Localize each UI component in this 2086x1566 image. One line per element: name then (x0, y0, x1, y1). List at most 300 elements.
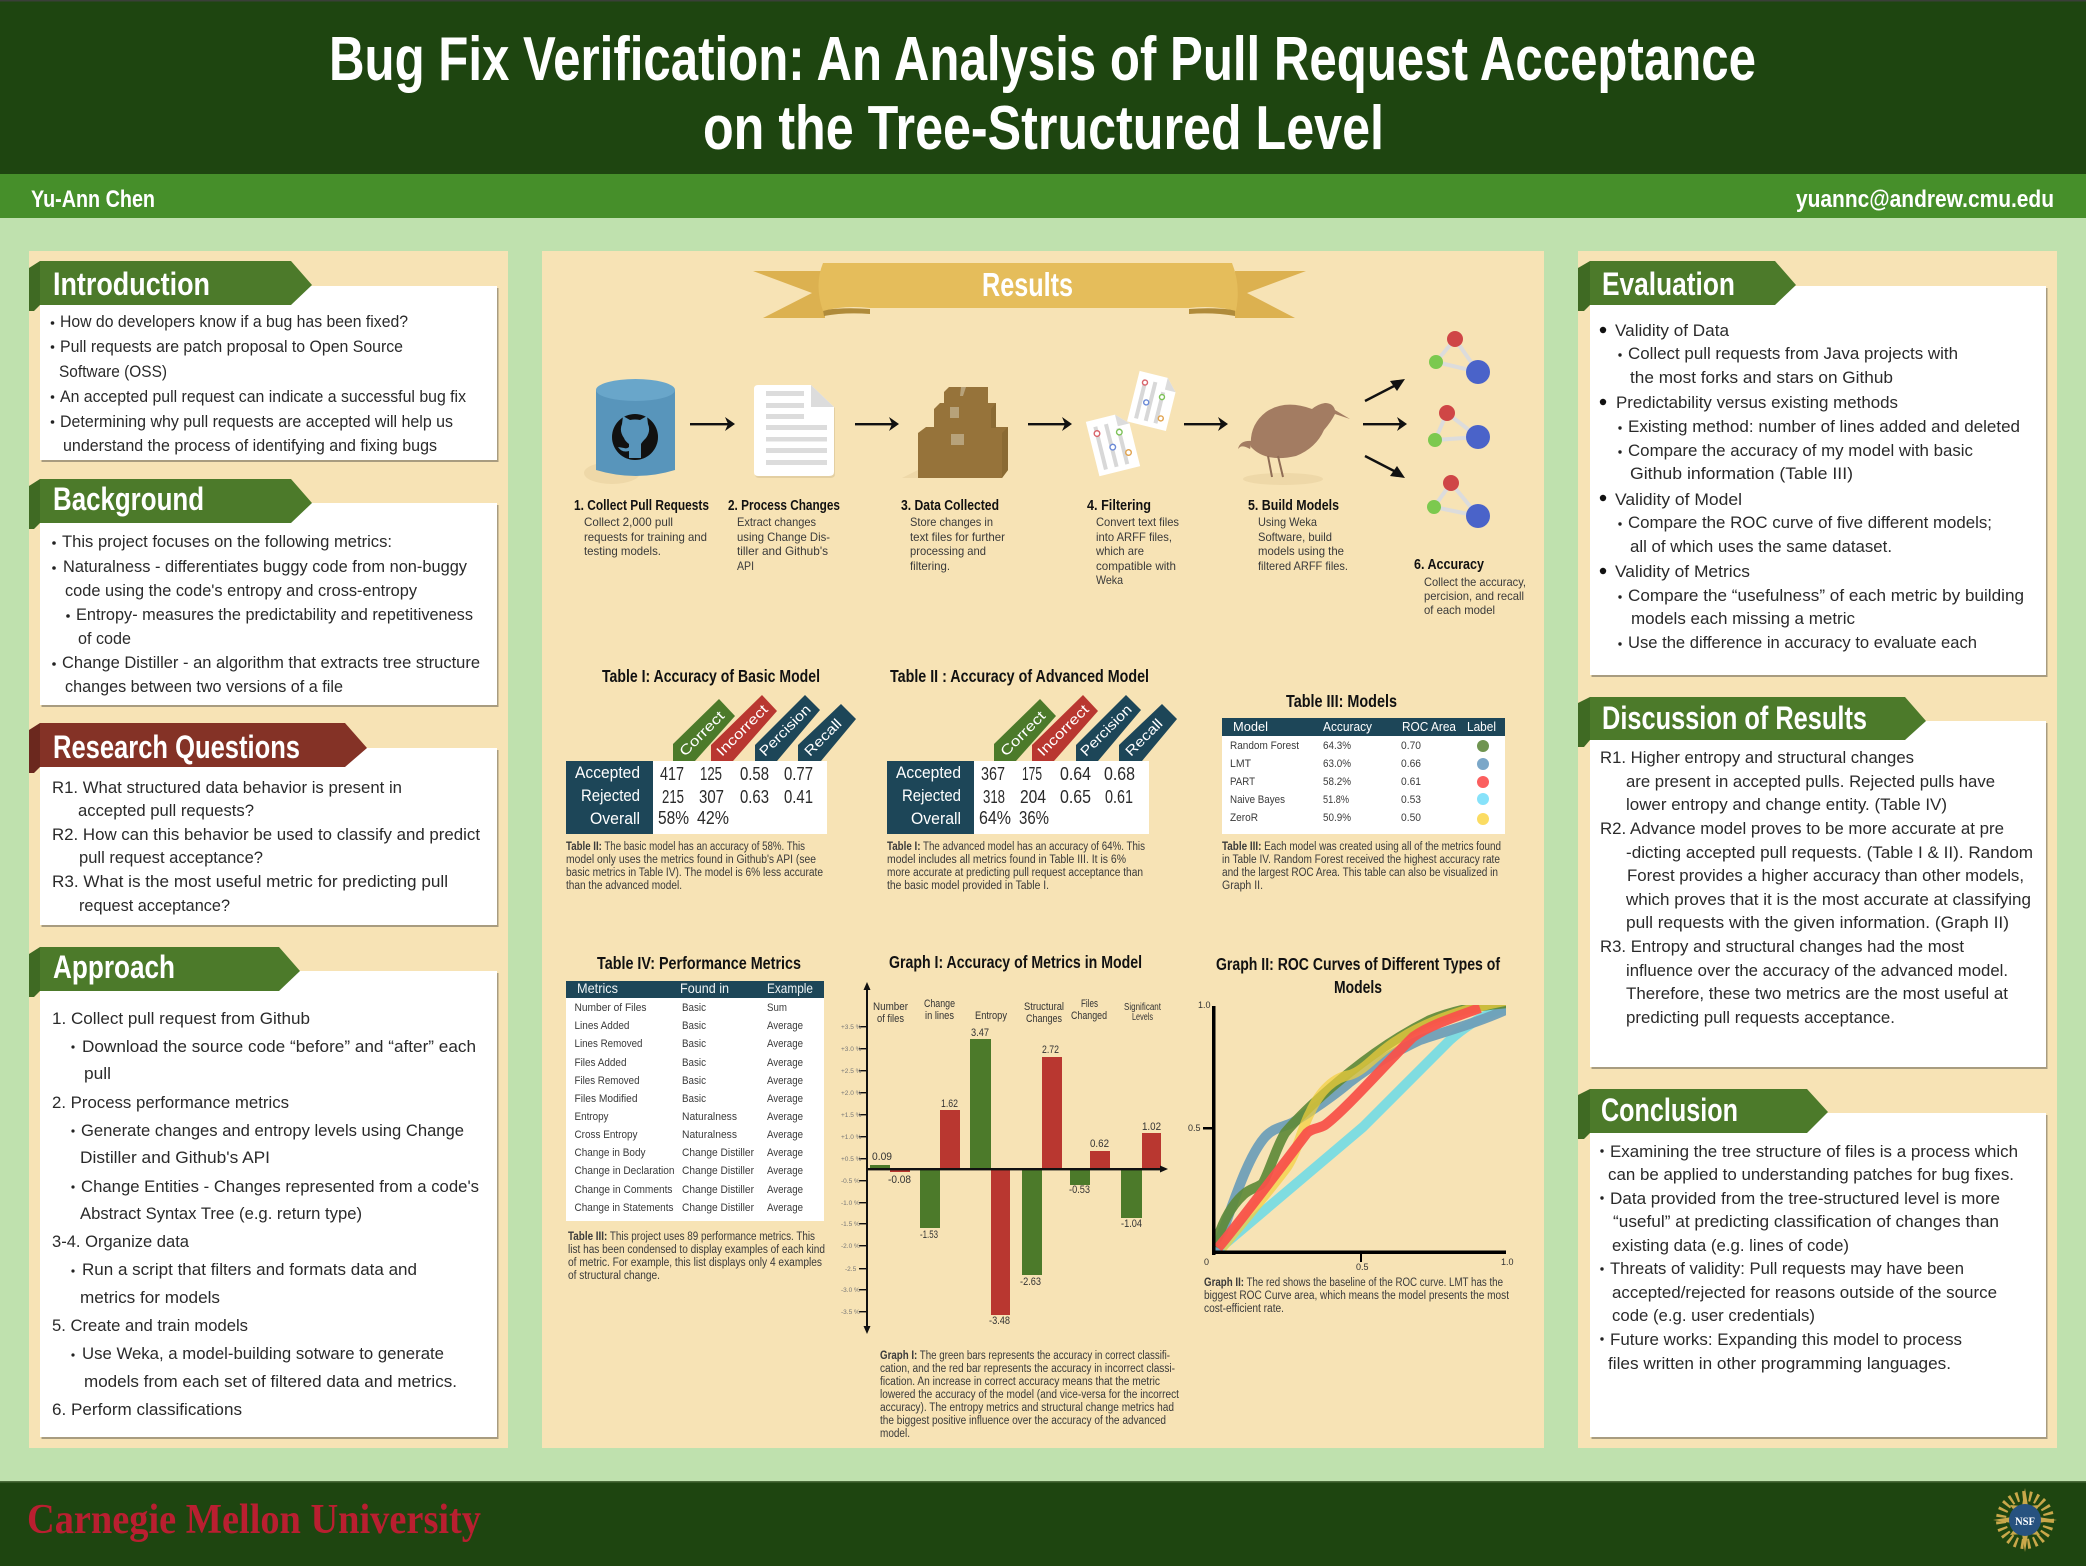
heading: discussion of results: Discussion of Results (1602, 700, 1867, 736)
text: evaluation bullets: Validity of Model (1615, 490, 1742, 509)
heading: results: Results (982, 266, 1073, 303)
text: research questions list: R1. What structured data behavior is present in (52, 778, 402, 797)
table II: accuracy of advanced model: Incorrect (1034, 701, 1092, 759)
heading: background: Background (53, 481, 204, 517)
text: approach steps: Generate changes and entropy levels using Change (81, 1121, 464, 1140)
table I: accuracy of basic model: 215 (662, 787, 684, 807)
arrow: step 2 to 3 (855, 417, 899, 431)
caption: graph I: cation, and the red bar represents the accuracy in incorrect classi- (880, 1363, 1175, 1375)
step 2 text: Extract changes (737, 515, 816, 529)
chart: graph I bar chart: -1.0 % (841, 1200, 860, 1207)
step 4 text: compatible with (1096, 559, 1176, 573)
caption: table IV: of structural change. (568, 1270, 660, 1282)
arrow: step 1 to 2 (690, 417, 735, 431)
chart: graph I bar chart: +2.5 % (841, 1068, 862, 1075)
table IV: performance metrics: Basic (682, 1038, 706, 1050)
table IV: performance metrics: Change in Declaration (574, 1165, 674, 1177)
table IV: performance metrics: Change Distiller (682, 1184, 754, 1196)
caption: table I (566, 841, 823, 892)
text: discussion answers (1600, 748, 2033, 1027)
text: conclusion bullets: code (e.g. user credentials) (1612, 1306, 1815, 1325)
table III: models: 0.70 (1401, 740, 1421, 752)
text: evaluation bullets (1600, 321, 2024, 652)
author name: Yu-Ann Chen (31, 186, 155, 213)
caption: table II: model includes all metrics found in Table III. It is 6% (887, 854, 1126, 866)
text: introduction bullets: Determining why pull requests are accepted will help us (60, 412, 453, 431)
arrow: step 3 to 4 (1028, 417, 1072, 431)
step 2 text: API (737, 559, 754, 573)
table IV: performance metrics: Basic (682, 1002, 706, 1014)
text: discussion answers: which proves that it is the most accurate at classifying (1625, 890, 2031, 909)
caption: graph I: model. (880, 1428, 910, 1440)
table I: accuracy of basic model: 0.77 (784, 764, 813, 784)
chart: graph I bar chart: -1.5 % (841, 1221, 860, 1228)
table IV: performance metrics: Example (767, 980, 813, 996)
heading: evaluation: Evaluation (1602, 266, 1735, 302)
table IV: performance metrics: Change Distiller (682, 1165, 754, 1177)
text: background bullets (52, 532, 480, 696)
table I: accuracy of basic model: 417 (660, 764, 684, 784)
caption: table IV: of metric. For example, this list displays only 4 examples (568, 1257, 822, 1269)
table IV: performance metrics: Number of Files (574, 1002, 647, 1014)
table IV: performance metrics: Average (767, 1184, 803, 1196)
table IV: performance metrics: Metrics (577, 980, 618, 996)
arrow: step 4 to 5 (1184, 417, 1228, 431)
chart: graph I bar chart: Files (1081, 998, 1098, 1010)
table IV: performance metrics: Cross Entropy (574, 1129, 638, 1141)
table I: accuracy of basic model: Rejected (581, 786, 640, 805)
table III: models: LMT (1230, 758, 1251, 770)
text: evaluation bullets: Github information (Table III) (1630, 464, 1853, 483)
text: conclusion bullets: accepted/rejected for reasons outside of the source (1612, 1283, 1997, 1302)
table IV: performance metrics: Found in (680, 980, 729, 996)
step 6 text: 6. Accuracy (1414, 557, 1484, 573)
step 5 text (1248, 498, 1348, 573)
text: conclusion bullets: existing data (e.g. lines of code) (1612, 1236, 1849, 1255)
caption: table I: basic metrics in Table IV). The model is 6% less accurate (566, 867, 823, 879)
chart: graph I bar chart: Significant (1124, 1002, 1161, 1013)
text: approach steps: 2. Process performance metrics (52, 1093, 289, 1112)
text: discussion answers: lower entropy and change entity. (Table IV) (1626, 795, 1947, 814)
icon: document (754, 385, 835, 478)
text: approach steps: Distiller and Github's API (80, 1148, 270, 1167)
text: approach steps: Run a script that filters and formats data and (82, 1260, 417, 1279)
text: approach steps (52, 1009, 479, 1419)
heading: graph II: Graph II: ROC Curves of Different Types of (1216, 954, 1500, 974)
chart: graph I bar chart: -0.53 (1069, 1184, 1090, 1196)
text: evaluation bullets: Compare the “usefulness” of each metric by building (1628, 586, 2024, 605)
chart: graph I bar chart: -1.53 (920, 1229, 938, 1241)
panel: results (542, 251, 1544, 1448)
table IV: performance metrics: Change in Statements (574, 1202, 674, 1214)
table I: accuracy of basic model: 0.41 (784, 787, 813, 807)
chart: graph I bar chart: 0.62 (1090, 1138, 1109, 1150)
text: background bullets: changes between two versions of a file (65, 677, 343, 696)
table IV: performance metrics: Average (767, 1165, 803, 1177)
text: approach steps: Use Weka, a model-building sotware to generate (82, 1344, 444, 1363)
chart: graph I bar chart: Number (873, 1001, 908, 1013)
chart: graph II ROC curves: 0 (1204, 1257, 1209, 1267)
caption: table III: and the largest ROC Area. This table can also be visualized in (1222, 867, 1498, 879)
caption: table I: model only uses the metrics found in Github's API (see (566, 854, 816, 866)
table III: models: 63.0% (1323, 758, 1351, 770)
caption: table II: the basic model provided in Table I. (887, 880, 1049, 892)
chart: graph I bar chart: -2.5 (845, 1266, 857, 1273)
step 3 text: filtering. (910, 559, 950, 573)
table IV: performance metrics: Change Distiller (682, 1147, 754, 1159)
table IV: performance metrics: Basic (682, 1075, 706, 1087)
text: research questions list: R2. How can this behavior be used to classify and predict (52, 825, 480, 844)
step 4 text: Convert text files (1096, 515, 1179, 529)
logo: nsf seal (1993, 1488, 2057, 1552)
caption: table III: in Table IV. Random Forest received the highest accuracy rate (1222, 854, 1500, 866)
text: research questions list: pull request acceptance? (79, 848, 263, 867)
table III: models: ZeroR (1230, 812, 1258, 824)
caption: table III: Graph II. (1222, 880, 1263, 892)
text: approach steps: 5. Create and train models (52, 1316, 248, 1335)
text: research questions list (52, 778, 480, 915)
step 2 text: using Change Dis- (737, 530, 830, 544)
table IV: performance metrics: Sum (767, 1002, 787, 1014)
step 1 text: testing models. (584, 544, 661, 558)
step 5 text: filtered ARFF files. (1258, 559, 1348, 573)
chart: graph I bar chart: +0.5 % (841, 1156, 862, 1163)
chart: graph II ROC curves: 0.5 (1356, 1262, 1369, 1272)
banner: results (753, 263, 1306, 318)
text: evaluation bullets: Use the difference in accuracy to evaluate each (1628, 633, 1977, 652)
table I: accuracy of basic model: 0.58 (740, 764, 769, 784)
text: conclusion bullets: files written in other programming languages. (1608, 1354, 1951, 1373)
chart: graph I bar chart: 1.62 (941, 1098, 958, 1110)
step 1 text: Collect 2,000 pull (584, 515, 673, 529)
table IV: performance metrics: Naturalness (682, 1129, 737, 1141)
table II: accuracy of advanced model: Accepted (896, 763, 961, 782)
table I: accuracy of basic model: 42% (697, 808, 729, 828)
panel: approach (29, 947, 498, 1439)
table IV: performance metrics: Basic (682, 1057, 706, 1069)
step 1 text: 1. Collect Pull Requests (574, 498, 709, 514)
step 4 text: which are (1095, 544, 1144, 558)
title: on the Tree-Structured Level (703, 94, 1384, 163)
caption: graph I: Graph I: The green bars represents the accuracy in correct classifi- (880, 1350, 1170, 1362)
table IV: performance metrics: Basic (682, 1093, 706, 1105)
logo: nsf seal: NSF (2015, 1514, 2035, 1528)
heading: graph II: Models (1334, 977, 1382, 997)
chart: graph I bar chart: -0.5 % (841, 1178, 860, 1185)
table III: models: 0.50 (1401, 812, 1421, 824)
step 2 text: 2. Process Changes (728, 498, 840, 514)
table III: models: 50.9% (1323, 812, 1351, 824)
title: Bug Fix Verification: An Analysis of Pull Request Acceptance (329, 25, 1756, 94)
text: evaluation bullets: Collect pull requests from Java projects with (1628, 344, 1958, 363)
chart: graph II ROC curves: 1.0 (1501, 1257, 1514, 1267)
caption: table IV (568, 1231, 825, 1282)
table IV: performance metrics: Naturalness (682, 1111, 737, 1123)
chart: graph I bar chart: Levels (1132, 1012, 1153, 1023)
table III: models: 0.61 (1401, 776, 1421, 788)
table II: accuracy of advanced model: Correct (997, 707, 1049, 759)
table I: accuracy of basic model: 0.63 (740, 787, 769, 807)
text: approach steps: pull (84, 1064, 111, 1083)
step 3 text: text files for further (910, 530, 1005, 544)
chart: graph I bar chart: 3.47 (971, 1027, 989, 1039)
text: background bullets: Change Distiller - an algorithm that extracts tree structure (62, 653, 480, 672)
caption: table II: Table I: The advanced model has an accuracy of 64%. This (887, 841, 1145, 853)
table II: accuracy of advanced model: 0.64 (1060, 764, 1091, 784)
caption: graph I: the biggest positive influence over the accuracy of the advanced (880, 1415, 1166, 1427)
table IV: performance metrics: Average (767, 1075, 803, 1087)
heading: table II: Table II : Accuracy of Advanced Model (890, 666, 1149, 686)
text: introduction bullets: Software (OSS) (59, 362, 167, 381)
table II: accuracy of advanced model: 175 (1022, 764, 1042, 784)
text: background bullets: of code (78, 629, 131, 648)
table IV: performance metrics: Basic (682, 1020, 706, 1032)
caption: graph II: Graph II: The red shows the baseline of the ROC curve. LMT has the (1204, 1277, 1503, 1289)
table IV: performance metrics: Average (767, 1038, 803, 1050)
table III: models: Random Forest (1230, 740, 1299, 752)
table III: models: 0.53 (1401, 794, 1421, 806)
table II: accuracy of advanced model: 367 (981, 764, 1005, 784)
heading: research questions: Research Questions (53, 729, 300, 765)
panel: discussion of results (1578, 697, 2048, 1069)
heading: approach: Approach (53, 949, 175, 985)
text: background bullets: Entropy- measures the predictability and repetitiveness (76, 605, 473, 624)
text: conclusion bullets (1600, 1142, 2018, 1373)
text: introduction bullets: How do developers know if a bug has been fixed? (60, 312, 408, 331)
text: research questions list: request acceptance? (79, 896, 230, 915)
icon: model network bottom (1427, 475, 1490, 528)
table IV: performance metrics: Average (767, 1202, 803, 1214)
panel: conclusion (1578, 1089, 2048, 1439)
caption: table IV: Table III: This project uses 89 performance metrics. This (568, 1231, 815, 1243)
text: approach steps: Download the source code “before” and “after” each (82, 1037, 476, 1056)
icon: github database cylinder (584, 379, 675, 484)
text: background bullets: Naturalness - differentiates buggy code from non-buggy (63, 557, 467, 576)
caption: graph I: fication. An increase in correct accuracy means that the metric (880, 1376, 1160, 1388)
table III: models: ROC Area (1402, 719, 1457, 734)
chart: graph I bar chart: -2.63 (1020, 1276, 1041, 1288)
table IV: performance metrics: Average (767, 1129, 803, 1141)
table I: accuracy of basic model: Overall (590, 809, 640, 828)
text: discussion answers: predicting pull requests acceptance. (1626, 1008, 1895, 1027)
text: conclusion bullets: Threats of validity: Pull requests may have been (1610, 1259, 1964, 1278)
table IV: performance metrics: Lines Removed (574, 1038, 642, 1050)
text: background bullets: This project focuses on the following metrics: (62, 532, 392, 551)
text: evaluation bullets: Validity of Data (1615, 321, 1730, 340)
arrows: model to accuracy (1363, 379, 1407, 478)
chart: graph I bar chart: 0.09 (872, 1151, 892, 1163)
step 4 text: 4. Filtering (1087, 498, 1151, 514)
table I: accuracy of basic model: 58% (658, 808, 689, 828)
text: approach steps: Abstract Syntax Tree (e.g. return type) (80, 1204, 362, 1223)
step 5 text: Using Weka (1258, 515, 1317, 529)
heading: table III: Table III: Models (1286, 691, 1397, 711)
step 6 text: percision, and recall (1424, 589, 1524, 603)
step 4 text: into ARFF files, (1096, 530, 1172, 544)
panel: introduction (29, 261, 498, 462)
table III: models: Accuracy (1323, 719, 1372, 734)
caption: table III (1222, 841, 1501, 892)
step 5 text: 5. Build Models (1248, 498, 1339, 514)
header band (0, 0, 2086, 174)
table II: accuracy of advanced model: Percision (1077, 701, 1135, 759)
chart: graph I bar chart: in lines (925, 1010, 954, 1022)
table II: accuracy of advanced model: Rejected (902, 786, 961, 805)
table I: accuracy of basic model: Recall (801, 715, 845, 759)
table IV: performance metrics: Average (767, 1020, 803, 1032)
step 4 text (1087, 498, 1179, 587)
chart: graph II ROC curves (1188, 1000, 1514, 1272)
text: discussion answers: Therefore, these two metrics are the most useful at (1626, 984, 2008, 1003)
step 1 text (574, 498, 709, 558)
step 6 text: of each model (1424, 603, 1495, 617)
text: evaluation bullets: Predictability versus existing methods (1616, 393, 1898, 412)
chart: graph I bar chart: -3.0 % (841, 1287, 860, 1294)
table IV: performance metrics: Files Removed (574, 1075, 640, 1087)
chart: graph I bar chart: +1.0 % (841, 1134, 862, 1141)
text: evaluation bullets: models each missing a metric (1631, 609, 1855, 628)
table IV: performance metrics: Average (767, 1093, 803, 1105)
logo: university wordmark: Carnegie Mellon University (27, 1497, 481, 1543)
step 5 text: Software, build (1258, 530, 1332, 544)
text: discussion answers: R3. Entropy and structural changes had the most (1600, 937, 1964, 956)
step 3 text (901, 498, 1005, 573)
table IV: performance metrics: Change in Body (574, 1147, 646, 1159)
text: conclusion bullets: “useful” at predicting classification of changes than (1613, 1212, 1999, 1231)
text: research questions list: accepted pull requests? (78, 801, 254, 820)
caption: table III: Table III: Each model was created using all of the metrics found (1222, 841, 1501, 853)
caption: graph I: lowered the accuracy of the model (and vice-versa for the incorrect (880, 1389, 1180, 1401)
chart: graph I bar chart: Changes (1026, 1013, 1062, 1025)
text: approach steps: 6. Perform classifications (52, 1400, 242, 1419)
text: evaluation bullets: Existing method: number of lines added and deleted (1628, 417, 2020, 436)
icon: model network top (1429, 331, 1490, 384)
step 2 text (728, 498, 840, 573)
table III: models: 0.66 (1401, 758, 1421, 770)
chart: graph I bar chart: -1.04 (1121, 1218, 1142, 1230)
table II: accuracy of advanced model: Overall (911, 809, 961, 828)
table II: accuracy of advanced model: 204 (1020, 787, 1046, 807)
table IV: performance metrics: Change in Comments (574, 1184, 673, 1196)
table I: accuracy of basic model: 307 (699, 787, 724, 807)
text: evaluation bullets: all of which uses the same dataset. (1630, 537, 1892, 556)
table I: accuracy of basic model: Correct (676, 707, 728, 759)
text: background bullets: code using the code's entropy and cross-entropy (65, 581, 417, 600)
caption: graph II: biggest ROC Curve area, which means the model presents the most (1204, 1290, 1510, 1302)
panel: left column (29, 251, 508, 1448)
text: approach steps: 3-4. Organize data (52, 1232, 190, 1251)
step 6 text (1414, 557, 1526, 617)
table IV: performance metrics: Average (767, 1057, 803, 1069)
table IV: performance metrics: Lines Added (574, 1020, 630, 1032)
step 1 text: requests for training and (584, 530, 707, 544)
caption: table I: Table II: The basic model has an accuracy of 58%. This (566, 841, 805, 853)
table II: accuracy of advanced model: 64% (979, 808, 1011, 828)
chart: graph I bar chart: Changed (1071, 1010, 1107, 1022)
heading: introduction: Introduction (53, 266, 210, 302)
table I: accuracy of basic model (566, 695, 856, 834)
table I: accuracy of basic model: Accepted (575, 763, 640, 782)
panel: evaluation (1578, 261, 2048, 677)
heading: table I: Table I: Accuracy of Basic Model (602, 666, 820, 686)
caption: graph II (1204, 1277, 1510, 1315)
icon: stacked boxes (902, 387, 1008, 478)
chart: graph I bar chart: -3.48 (989, 1315, 1010, 1327)
text: research questions list: R3. What is the most useful metric for predicting pull (52, 872, 448, 891)
caption: graph I: accuracy). The entropy metrics and structural change metrics had (880, 1402, 1174, 1414)
table I: accuracy of basic model: 125 (700, 764, 722, 784)
author email: yuannc@andrew.cmu.edu (1796, 186, 2054, 213)
step 3 text: processing and (910, 544, 986, 558)
text: discussion answers: Forest provides a higher accuracy than other models, (1627, 866, 2024, 885)
text: discussion answers: -dicting accepted pull requests. (Table I & II). Random (1626, 843, 2033, 862)
step 4 text: Weka (1096, 573, 1123, 587)
text: introduction bullets: An accepted pull request can indicate a successful bug fix (60, 387, 466, 406)
table III: models: 51.8% (1323, 794, 1349, 806)
chart: graph I bar chart: 1.02 (1142, 1121, 1161, 1133)
panel: research questions (29, 723, 498, 927)
chart: graph I bar chart: -0.08 (888, 1174, 911, 1186)
table II: accuracy of advanced model: 0.65 (1060, 787, 1091, 807)
table II: accuracy of advanced model: 318 (983, 787, 1005, 807)
caption: table IV: list has been condensed to display examples of each kind (568, 1244, 825, 1256)
text: conclusion bullets: can be applied to understanding patches for bug fixes. (1608, 1165, 2014, 1184)
icon: kiwi bird (1238, 403, 1350, 485)
chart: graph I bar chart: Structural (1024, 1001, 1064, 1013)
text: discussion answers: pull requests with the given information. (Graph II) (1626, 913, 2009, 932)
chart: graph I bar chart: +1.5 % (841, 1112, 862, 1119)
table III: models: Label (1467, 719, 1496, 734)
text: approach steps: 1. Collect pull request from Github (52, 1009, 310, 1028)
text: evaluation bullets: the most forks and stars on Github (1630, 368, 1893, 387)
table III: models: PART (1230, 776, 1255, 788)
footer band (0, 1481, 2086, 1566)
step 3 text: Store changes in (910, 515, 993, 529)
text: introduction bullets (51, 312, 466, 455)
table III: models: 58.2% (1323, 776, 1351, 788)
chart: graph I bar chart: -3.5 % (841, 1309, 860, 1316)
table II: accuracy of advanced model: 0.61 (1105, 787, 1133, 807)
table III: models (1222, 718, 1505, 834)
table IV: performance metrics: Entropy (574, 1111, 609, 1123)
table I: accuracy of basic model: Incorrect (713, 701, 771, 759)
step 2 text: tiller and Github's (737, 544, 828, 558)
chart: graph I bar chart: of files (877, 1013, 904, 1025)
chart: graph I bar chart: +2.0 % (841, 1090, 862, 1097)
text: discussion answers: R1. Higher entropy and structural changes (1600, 748, 1914, 767)
table I: accuracy of basic model: Percision (756, 701, 814, 759)
heading: table IV: Table IV: Performance Metrics (597, 953, 801, 973)
caption: table II: more accurate at predicting pull request acceptance than (887, 867, 1143, 879)
text: introduction bullets: understand the process of identifying and fixing bugs (63, 436, 437, 455)
panel: right column (1578, 251, 2057, 1448)
chart: graph I bar chart: Entropy (975, 1010, 1007, 1022)
heading: conclusion: Conclusion (1601, 1092, 1738, 1128)
text: approach steps: Change Entities - Changes represented from a code's (81, 1177, 479, 1196)
text: conclusion bullets: Examining the tree structure of files is a process which (1610, 1142, 2018, 1161)
chart: graph I bar chart (841, 982, 1168, 1334)
table IV: performance metrics: Files Added (574, 1057, 626, 1069)
table II: accuracy of advanced model: 36% (1019, 808, 1049, 828)
table III: models: Model (1233, 719, 1268, 734)
chart: graph I bar chart: +3.5 % (841, 1024, 862, 1031)
step 5 text: models using the (1258, 544, 1344, 558)
heading: graph II (1216, 954, 1500, 997)
table IV: performance metrics (566, 980, 824, 1221)
table III: models: Naive Bayes (1230, 794, 1285, 806)
table IV: performance metrics: Files Modified (574, 1093, 638, 1105)
text: discussion answers: are present in accepted pulls. Rejected pulls have (1626, 772, 1995, 791)
